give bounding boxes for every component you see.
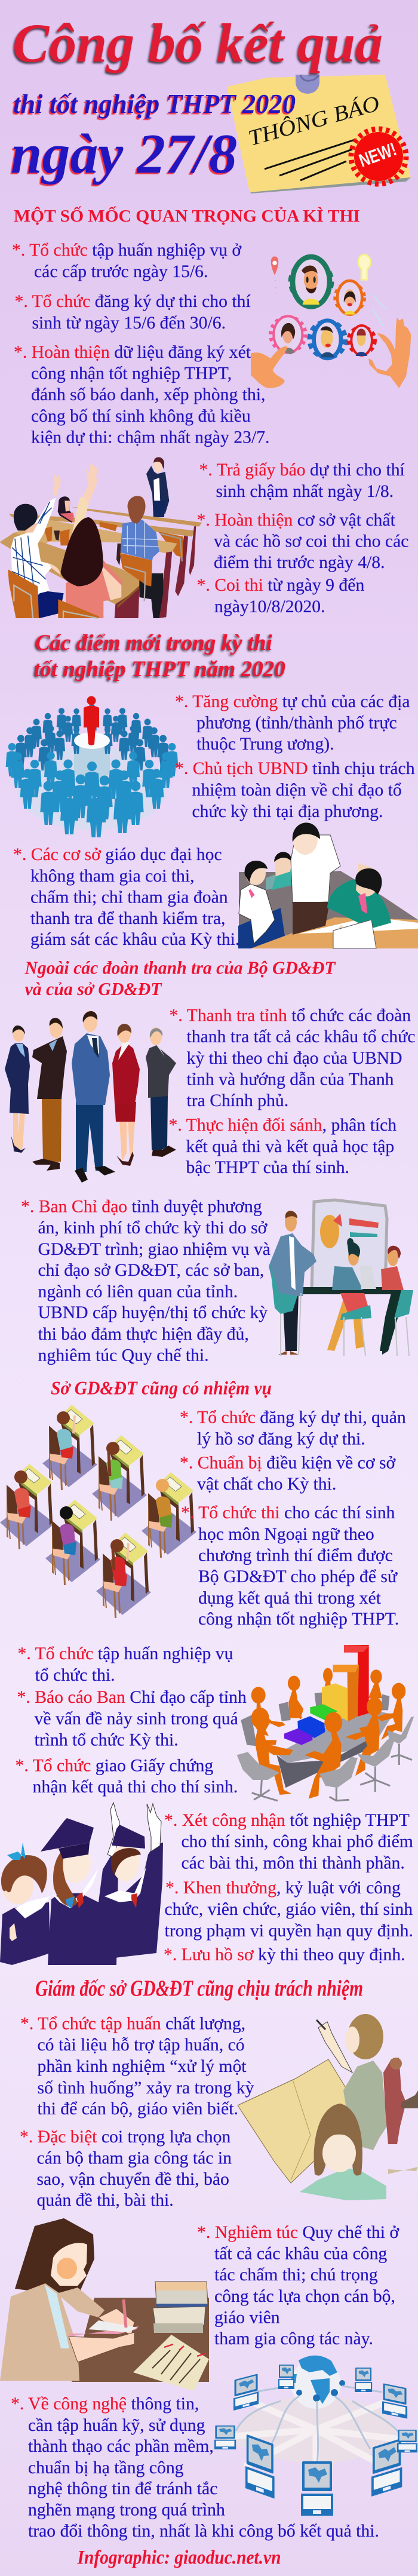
text block: department tasks: công nhận tốt nghiệp THPT. [198, 1610, 399, 1629]
text block: new points 1-2: phương (tỉnh/thành phố trực [196, 713, 397, 732]
text block: steering committee: thi bảo đảm thực hiện đầy đủ, [38, 1325, 249, 1344]
text block: director 3: tham gia công tác này. [214, 2329, 373, 2348]
text block: director 1-2: phần kinh nghiệm “xử lý một [37, 2057, 247, 2076]
text block: department tasks: lý hồ sơ đăng ký dự thi. [197, 1430, 365, 1449]
text block: inspection: kết quả thi và kết quả học tập [186, 1137, 394, 1156]
text block: steering committee: *. Ban Chỉ đạo tỉnh duyệt phương [21, 1197, 262, 1216]
text block: director 3: *. Nghiêm túc Quy chế thi ở [197, 2223, 399, 2242]
text block: director 1-2: *. Đặc biệt coi trọng lựa chọn [20, 2127, 230, 2147]
text block: milestones 1-3: *. Tổ chức tập huấn nghiệp vụ ở [12, 241, 242, 260]
text block: department tasks 2 [16, 1644, 247, 1797]
illustration: teacher with open book [238, 2014, 418, 2200]
text block: department tasks 3: *. Xét công nhận tốt nghiệp THPT [164, 1811, 410, 1830]
illustration: isometric exam desks [0, 1405, 196, 1618]
icon: gears with faces and hands [251, 254, 411, 388]
text block: inspection [168, 1006, 415, 1177]
text block: department tasks 3: chức, viên chức, giáo viên, thí sinh [165, 1900, 413, 1919]
illustration: meeting around bar chart [237, 1645, 414, 1801]
text block: new points 3: *. Các cơ sở giáo dục đại học [13, 845, 222, 864]
text block: department tasks 2: tổ chức thi. [35, 1666, 115, 1685]
text block: department tasks 2: *. Tổ chức tập huấn nghiệp vụ [18, 1644, 233, 1663]
text block: department tasks 3: *. Khen thưởng, kỷ luật với công [165, 1878, 401, 1898]
text block: director 1-2: thi để cán bộ, giáo viên biết. [37, 2099, 238, 2118]
illustration: presentation meeting [269, 1200, 413, 1356]
title: thi tốt nghiệp THPT 2020 [13, 89, 296, 119]
text block: new points 3: giám sát các khâu của Kỳ thi. [30, 930, 239, 949]
text block: new points 3: chấm thi; chỉ tham gia đoàn [30, 888, 228, 907]
text block: director 3 [197, 2223, 399, 2348]
icon: yellow note THÔNG BÁO with pin and NEW burst: THÔNG BÁO [245, 91, 382, 151]
text block: milestones 4-6: *. Coi thi từ ngày 9 đến [197, 576, 364, 595]
text block: department tasks 3: các bài thi, môn thi thành phần. [182, 1854, 405, 1873]
text block: technology: nghệ thông tin để tránh tắc [28, 2479, 217, 2498]
text block: new points 3: thanh tra để thanh kiểm tra, [30, 909, 225, 928]
text block: milestones 1-3: kiện dự thi: chậm nhất ngày 23/7. [31, 428, 269, 447]
text block: technology: thành thạo các phần mềm, [28, 2437, 214, 2456]
text block: department tasks 3: trong phạm vi quyền hạn quy định. [165, 1921, 413, 1941]
text block: milestones 4-6: ngày10/8/2020. [214, 597, 325, 616]
text block: new points 1-2: nhiệm toàn diện về chỉ đạo tổ [192, 781, 402, 800]
text block: director 3: giáo viên [214, 2308, 280, 2327]
text block: steering committee: án, kinh phí tổ chức kỳ thi do sở [38, 1218, 268, 1238]
text block: director 1-2: *. Tổ chức tập huấn chất lượng, [20, 2014, 245, 2033]
text block: director 1-2: quản đề thi, bài thi. [37, 2191, 174, 2210]
illustration: woman grading papers [0, 2218, 209, 2391]
illustration: graduates cheering [0, 1803, 163, 1965]
illustration: crowd around red leader [6, 696, 178, 837]
text block: technology: cần tập huấn kỹ, sử dụng [28, 2416, 205, 2435]
text block: director 1-2: có tài liệu hỗ trợ tập huấn, có [37, 2035, 245, 2055]
text block: milestones 1-3: công nhận tốt nghiệp THPT, [31, 364, 232, 383]
illustration: students taking exam [238, 822, 418, 948]
text block: milestones 4-6: *. Hoàn thiện cơ sở vật chất [197, 511, 396, 530]
text block: inspection: tra Chính phủ. [186, 1091, 288, 1110]
heading: inspection teams: Ngoài các đoàn thanh tra của Bộ GD&ĐT [24, 957, 336, 978]
text block: inspection: *. Thanh tra tỉnh tổ chức các đoàn [170, 1006, 411, 1025]
text block: director 3: tất cả các khâu của công [214, 2245, 387, 2264]
title: ngày 27/8 [11, 123, 237, 185]
text block: steering committee: chỉ đạo sở GD&ĐT, các sở ban, [38, 1261, 264, 1280]
text block: milestones 1-3: sinh từ ngày 15/6 đến 30/6. [32, 314, 226, 333]
text block: new points 1-2 [175, 692, 415, 821]
text block: technology: nghẽn mạng trong quá trình [28, 2500, 225, 2519]
heading: new points: Các điểm mới trong kỳ thi [35, 631, 273, 655]
text block: department tasks 2: trình tổ chức Kỳ thi. [35, 1731, 179, 1750]
heading: new points [34, 631, 285, 681]
text block: inspection: bậc THPT của thí sinh. [186, 1158, 349, 1177]
text block: director 3: công tác lựa chọn cán bộ, [214, 2287, 395, 2306]
text block: technology: trao đổi thông tin, nhất là khi công bố kết quả thi. [28, 2522, 379, 2541]
text block: new points 1-2: thuộc Trung ương). [196, 735, 334, 754]
text block: new points 1-2: *. Chủ tịch UBND tỉnh chịu trách [175, 759, 415, 778]
text block: department tasks 2: *. Tổ chức giao Giấy chứng [16, 1756, 213, 1775]
text block: new points 1-2: *. Tăng cường tự chủ của các địa [175, 692, 410, 711]
heading: inspection teams: và của sở GD&ĐT [25, 978, 162, 999]
footer credit: Infographic: giaoduc.net.vn [77, 2547, 281, 2568]
text block: steering committee: UBND cấp huyện/thị tổ chức kỳ [38, 1303, 268, 1322]
text block: milestones 4-6: và các hồ sơ coi thi cho các [214, 532, 408, 551]
text block: technology [11, 2394, 379, 2541]
text block: milestones 4-6 [197, 460, 408, 616]
text block: steering committee: GD&ĐT trình; giao nhiệm vụ và [38, 1240, 271, 1259]
text block: technology: *. Về công nghệ thông tin, [11, 2394, 199, 2414]
text block: department tasks: *. Tổ chức đăng ký dự thi, quản [180, 1408, 406, 1427]
text block: department tasks: Bộ GD&ĐT cho phép để sử [198, 1567, 398, 1586]
illustration: five business people [5, 1011, 176, 1183]
text block: inspection: *. Thực hiện đối sánh, phân tích [168, 1116, 397, 1135]
icon: yellow note THÔNG BÁO with pin and NEW burst [227, 75, 411, 194]
text block: milestones 4-6: sinh chậm nhất ngày 1/8. [216, 482, 394, 501]
text block: department tasks [180, 1408, 406, 1629]
text block: director 1-2: cán bộ tham gia công tác in [37, 2149, 232, 2168]
text block: steering committee: ngành có liên quan của tỉnh. [38, 1282, 238, 1301]
text block: inspection: thanh tra tất cả các khâu tổ chức [186, 1027, 415, 1046]
text block: milestones 4-6: *. Trả giấy báo dự thi cho thí [199, 460, 405, 480]
text block: milestones 1-3: *. Hoàn thiện dữ liệu đăng ký xét [14, 343, 251, 362]
text block: inspection: tỉnh và hướng dẫn của Thanh [186, 1070, 394, 1089]
text block: steering committee: nghiêm túc Quy chế thi. [38, 1346, 209, 1365]
text block: milestones 1-3: công bố thí sinh không đủ kiều [31, 407, 251, 426]
title: Công bố kết quả [13, 13, 383, 73]
text block: director 1-2 [20, 2014, 254, 2210]
text block: department tasks 2: nhận kết quả thi cho thí sinh. [32, 1777, 238, 1797]
text block: department tasks 3 [164, 1811, 413, 1964]
text block: department tasks: *. Chuẩn bị điều kiện về cơ sở [180, 1454, 397, 1473]
text block: department tasks: *. Tổ chức thi cho các thí sinh [181, 1503, 395, 1522]
heading: new points: tốt nghiệp THPT năm 2020 [34, 657, 285, 681]
text block: department tasks: chương trình thí điểm được [198, 1546, 393, 1565]
text block: department tasks 2: về vấn đề nảy sinh trong quá [35, 1709, 238, 1728]
text block: inspection: kỳ thi theo chỉ đạo của UBND [186, 1049, 402, 1068]
illustration: global computer network [214, 2356, 418, 2516]
text block: milestones 1-3: *. Tổ chức đăng ký dự thi cho thí [14, 292, 251, 311]
heading: milestones: MỘT SỐ MỐC QUAN TRỌNG CỦA KÌ THI [14, 207, 360, 226]
text block: milestones 4-6: điểm thi trước ngày 4/8. [214, 553, 385, 572]
illustration: classroom with raised hands [0, 457, 202, 618]
text block: department tasks: vật chất cho Kỳ thi. [197, 1475, 336, 1494]
text block: department tasks 3: cho thí sinh, công khai phổ điểm [182, 1832, 413, 1852]
text block: milestones 1-3: các cấp trước ngày 15/6. [34, 262, 208, 281]
text block: department tasks: dụng kết quả thi trong xét [198, 1589, 382, 1608]
text block: director 3: tác chấm thi; chú trọng [214, 2265, 378, 2285]
text block: technology: chuẩn bị hạ tầng công [28, 2458, 184, 2477]
title [11, 13, 383, 185]
heading: department tasks: Sở GD&ĐT cũng có nhiệm vụ [51, 1377, 272, 1399]
text block: new points 3 [13, 845, 239, 949]
text block: department tasks 2: *. Báo cáo Ban Chỉ đạo cấp tỉnh [17, 1688, 247, 1707]
text block: director 1-2: số tình huống” xảy ra trong kỳ [37, 2078, 254, 2098]
text block: new points 1-2: chức kỳ thi tại địa phương. [192, 802, 383, 821]
text block: milestones 1-3 [12, 241, 269, 447]
heading: inspection teams [24, 957, 336, 999]
text block: department tasks 3: *. Lưu hồ sơ kỳ thi theo quy định. [164, 1945, 405, 1964]
text block: director 1-2: sao, vận chuyển đề thi, bảo [37, 2170, 229, 2189]
text block: steering committee [21, 1197, 271, 1365]
icon: yellow note THÔNG BÁO with pin and NEW burst: NEW! [356, 139, 399, 171]
text block: department tasks: học môn Ngoại ngữ theo [198, 1525, 374, 1544]
text block: new points 3: không tham gia coi thi, [30, 867, 195, 886]
text block: milestones 1-3: đánh số báo danh, xếp phòng thi, [31, 385, 265, 404]
